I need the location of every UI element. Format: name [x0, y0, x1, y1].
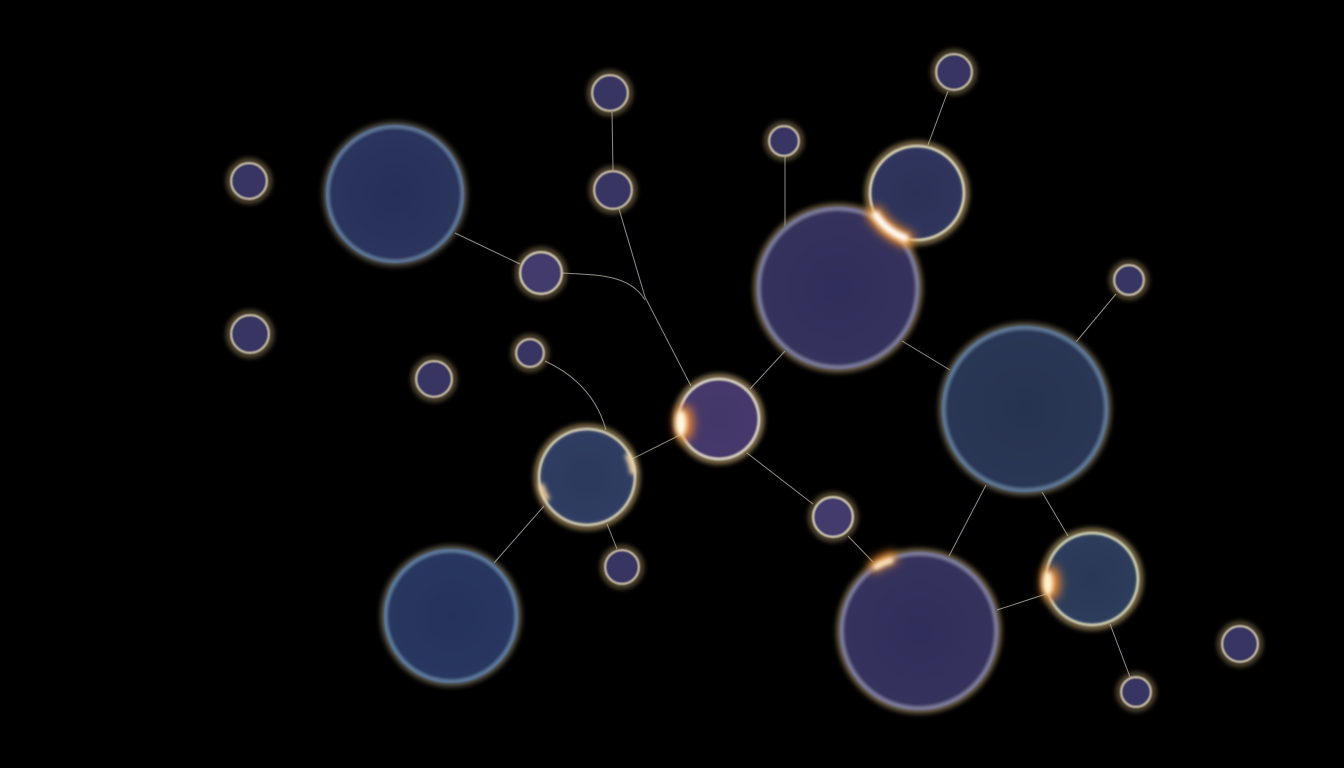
small node 5: [229, 161, 269, 201]
small node 12: [1112, 263, 1146, 297]
small nodes: [229, 52, 1260, 709]
small node 7: [414, 359, 454, 399]
small node 10: [811, 495, 855, 539]
highlight: contact glow: [871, 557, 896, 569]
small node 14: [1119, 675, 1153, 709]
small node 6: [229, 313, 271, 355]
small node 11: [603, 548, 641, 586]
small node 2: [592, 169, 634, 211]
highlight: contact arc: [872, 209, 912, 241]
large circle: right: [941, 325, 1109, 493]
highlight: left spark: [1042, 566, 1060, 600]
large circle: centre right purple: [756, 206, 920, 370]
small node 13: [1220, 624, 1260, 664]
highlight: right spark: [627, 454, 633, 474]
small node 8: [514, 337, 546, 369]
small node 1: [590, 73, 630, 113]
medium circle: central hub: [675, 377, 761, 461]
small node 3: [934, 52, 974, 92]
medium circle: lower right: [1042, 531, 1140, 627]
large circle: bottom right purple: [839, 551, 999, 711]
small node 9: [518, 250, 564, 296]
connector lines: [455, 91, 1130, 677]
medium circle: top right: [868, 144, 966, 242]
large circle: top left: [325, 124, 465, 264]
highlight: left spark: [675, 405, 693, 441]
small node 4: [767, 124, 801, 158]
highlight: left spark: [541, 484, 548, 500]
large circle: bottom left: [383, 548, 519, 684]
medium circle: centre left: [537, 427, 637, 527]
